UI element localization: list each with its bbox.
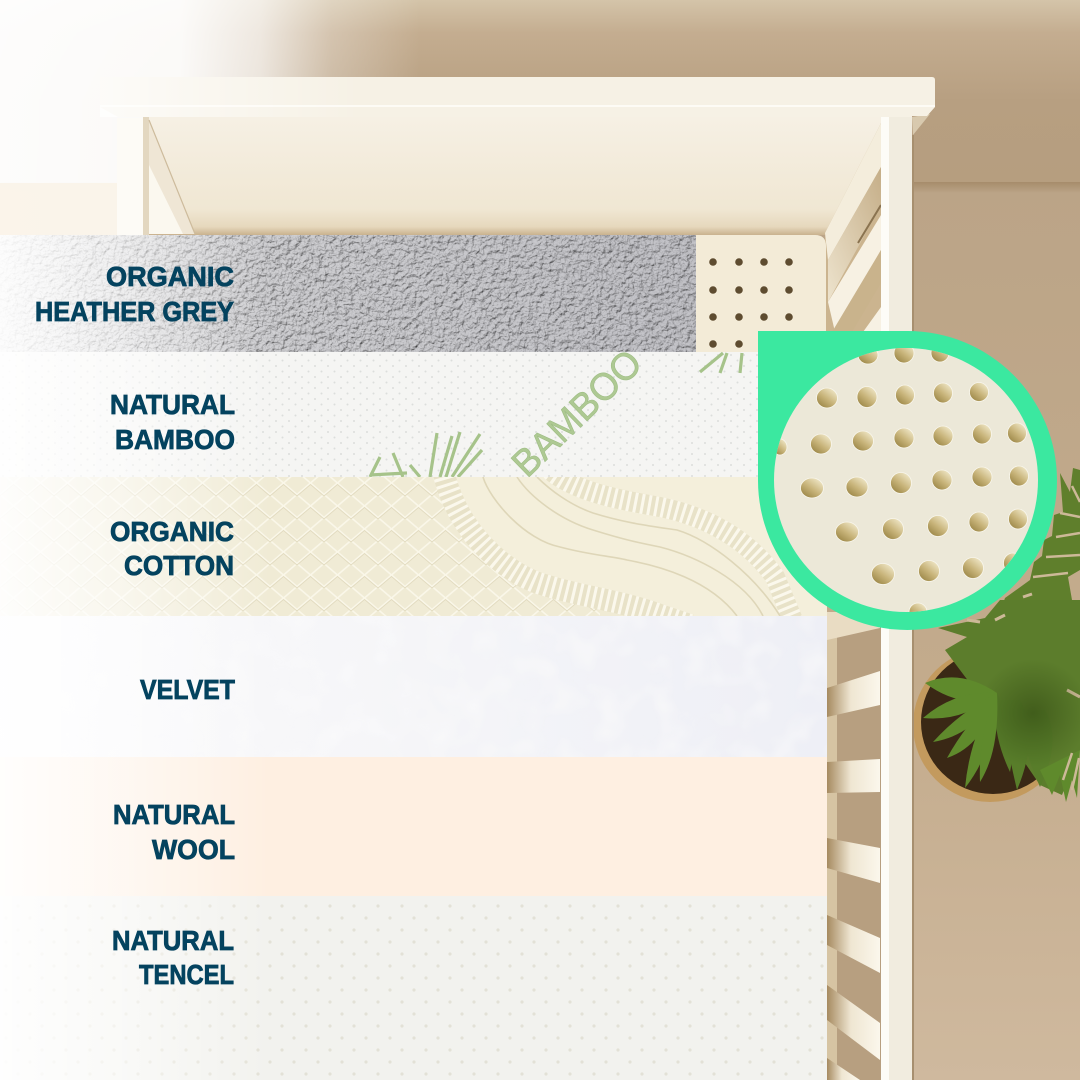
label: organic cotton: ORGANIC <box>110 516 234 547</box>
label: natural wool <box>113 799 235 865</box>
latex surface <box>774 348 1038 612</box>
fern dark centre <box>977 659 1080 767</box>
crib right side rails, lower <box>827 612 882 1080</box>
bamboo leaf motif <box>370 353 742 477</box>
fern foliage mass <box>938 600 1080 795</box>
front fern leaflets <box>923 677 997 788</box>
label: velvet: VELVET <box>140 674 235 705</box>
band: natural tencel fabric <box>0 896 827 1080</box>
label: natural tencel <box>112 925 234 990</box>
label: organic heather grey: ORGANIC <box>106 261 234 292</box>
band: organic cotton fabric <box>2 477 827 616</box>
band: organic heather grey fabric <box>0 235 696 352</box>
crib head panel <box>143 117 882 235</box>
label: natural bamboo <box>110 389 235 455</box>
back fern leaflets <box>995 693 1052 790</box>
label: natural bamboo: NATURAL <box>110 389 235 420</box>
crib left post <box>117 118 143 235</box>
latex mattress corner <box>690 235 826 352</box>
left white fade overlay <box>0 235 270 1080</box>
potted fern plant <box>913 468 1080 802</box>
bamboo woven label: BAMBOO <box>504 342 651 485</box>
label: natural bamboo: BAMBOO <box>115 424 235 455</box>
label: organic cotton <box>110 516 234 581</box>
rail left fade <box>100 77 360 117</box>
green teardrop frame <box>758 331 1057 630</box>
latex perforations <box>773 343 1028 621</box>
crib top rail <box>100 77 935 135</box>
crib right side rails, upper <box>825 123 881 332</box>
label: organic heather grey <box>35 261 234 327</box>
label: natural wool: NATURAL <box>113 799 235 830</box>
label: organic cotton: COTTON <box>124 550 234 581</box>
label: natural wool: WOOL <box>152 834 235 865</box>
callout: latex close-up lens <box>758 331 1057 630</box>
band: velvet fabric <box>0 616 827 757</box>
band: natural bamboo fabric <box>0 352 758 477</box>
band: natural wool fabric <box>0 757 827 896</box>
lower right fern frond <box>1040 750 1080 802</box>
crib right post <box>881 117 914 1080</box>
label: organic heather grey: HEATHER GREY <box>35 296 234 327</box>
plant pot <box>913 648 1067 802</box>
label: natural tencel: NATURAL <box>112 925 234 956</box>
label: natural tencel: TENCEL <box>139 959 234 990</box>
upper fern frond <box>990 468 1080 640</box>
